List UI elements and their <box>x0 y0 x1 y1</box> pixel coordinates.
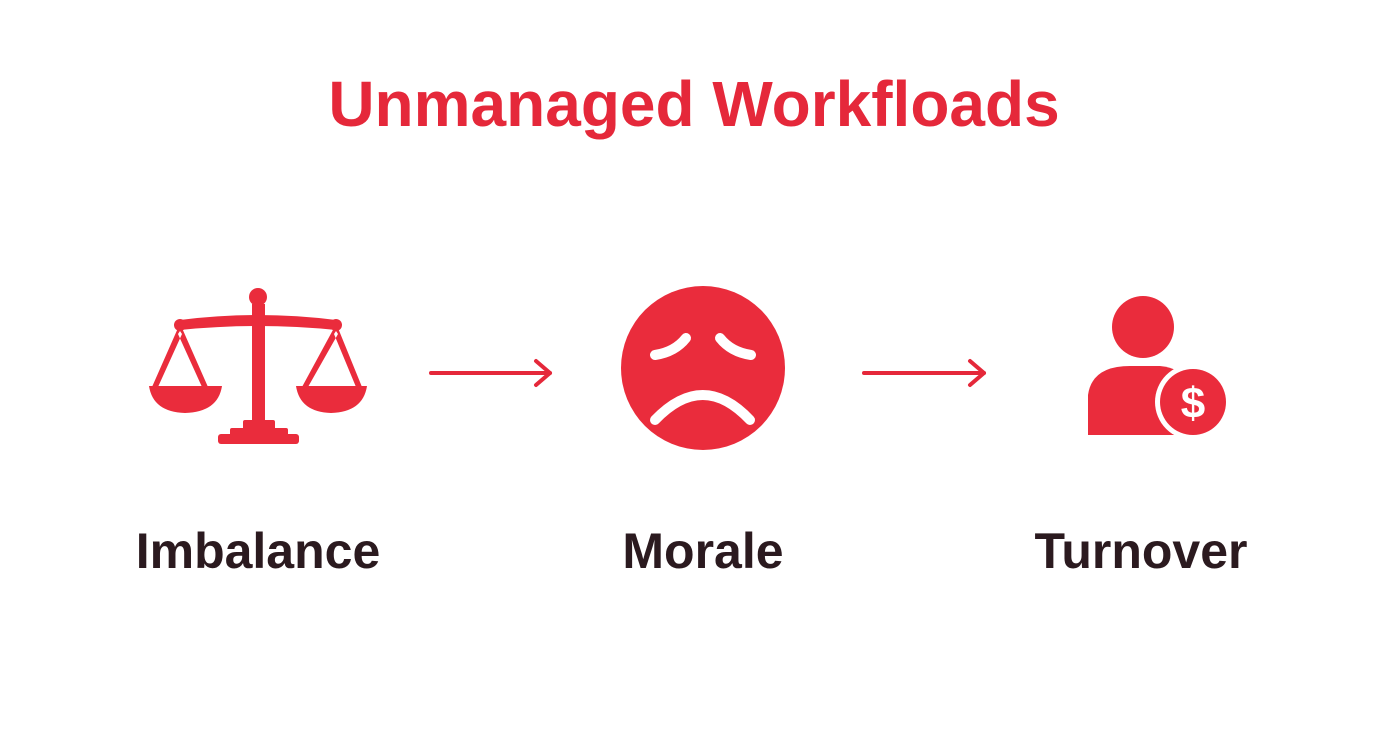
arrow 1 <box>431 361 550 385</box>
icon: scales <box>149 288 367 444</box>
label: Imbalance: Imbalance <box>136 523 380 579</box>
arrow 2 <box>864 361 984 385</box>
icon: person with coin <box>1088 296 1231 440</box>
title: Unmanaged Workfloads <box>328 68 1060 140</box>
icon: sad face <box>621 286 785 450</box>
icon: person with coin: $ <box>1181 379 1205 428</box>
label: Turnover: Turnover <box>1034 523 1248 579</box>
label: Morale: Morale <box>622 523 784 579</box>
